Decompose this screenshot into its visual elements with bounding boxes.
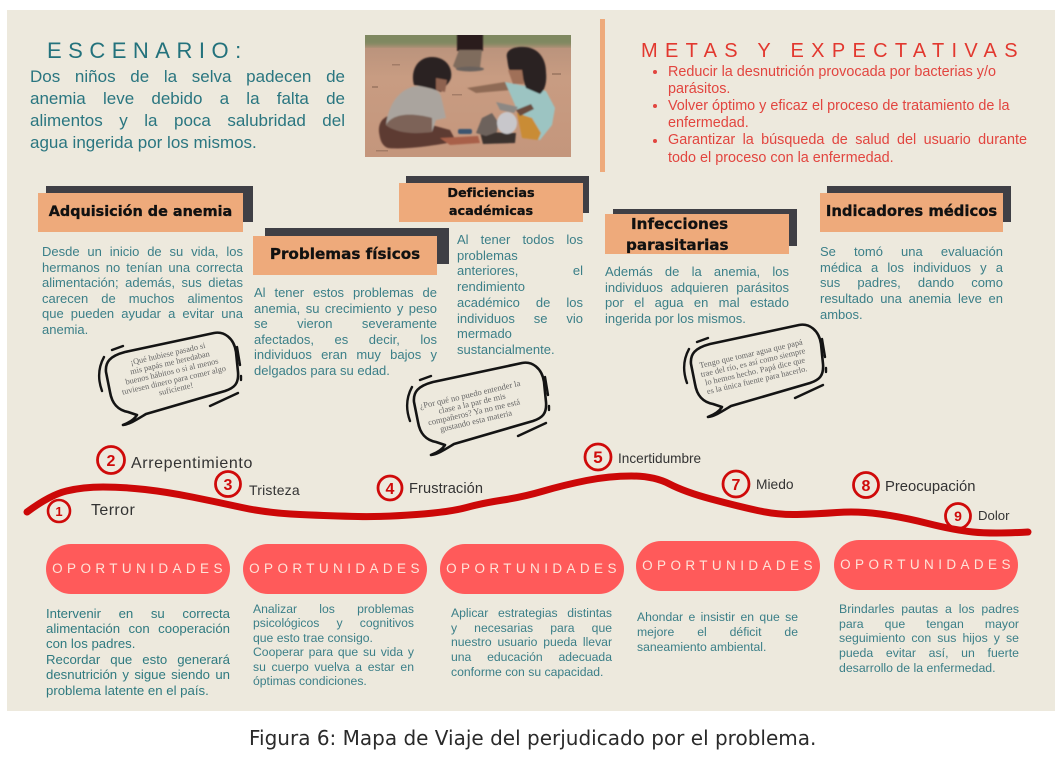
card: infecciones parasitarias bbox=[605, 209, 797, 326]
card text: anemia. bbox=[42, 322, 88, 337]
text: oportunidad 2: Analizar los problemas bbox=[253, 602, 414, 616]
pill: oportunidades 4: OPORTUNIDADES bbox=[642, 558, 817, 573]
emotion marker 2: 2 bbox=[107, 453, 116, 470]
text: oportunidad 5: Brindarles pautas a los padres bbox=[839, 602, 1019, 616]
card title bbox=[253, 236, 437, 275]
emotion marker 9 bbox=[946, 504, 970, 528]
speech bubble 3: lo hemos hecho. Papá dice que bbox=[704, 355, 806, 387]
card text: alimentación; además, sus dietas bbox=[42, 275, 243, 290]
card title: parasitarias bbox=[626, 236, 729, 254]
card text: individuos adquieren parásitos bbox=[605, 280, 789, 295]
card text: sustancialmente. bbox=[457, 342, 555, 357]
speech bubble 2: compañeros? Ya no me está bbox=[427, 396, 521, 427]
pill: oportunidades 2: OPORTUNIDADES bbox=[249, 561, 424, 576]
card text: afectados, es decir, los bbox=[254, 332, 437, 346]
card text: anteriores, el bbox=[457, 263, 583, 278]
text: oportunidad 3 bbox=[451, 606, 612, 679]
emotion marker 1: 1 bbox=[55, 504, 63, 519]
text: oportunidad 1: alimentación con cooperación bbox=[46, 621, 230, 636]
label: Arrepentimiento: Arrepentimiento bbox=[131, 455, 253, 472]
card title bbox=[38, 193, 243, 232]
card text: rendimiento bbox=[457, 279, 525, 294]
card: adquisición de anemia bbox=[38, 186, 253, 337]
text: oportunidad 4: mejore el déficit de bbox=[637, 625, 798, 639]
text: oportunidad 1: desnutrición y sigue siendo un bbox=[46, 667, 230, 682]
card text: problemas bbox=[457, 248, 518, 263]
emotion marker 5 bbox=[585, 444, 611, 470]
text: oportunidad 1: problema latente en el país. bbox=[46, 683, 209, 698]
card text: carecen de muchos alimentos bbox=[42, 291, 243, 306]
card text bbox=[457, 232, 583, 357]
text: oportunidad 3: Aplicar estrategias distintas bbox=[451, 606, 612, 620]
card text: individuos se vio bbox=[457, 311, 583, 326]
text: oportunidad 5: desarrollo de la enfermedad. bbox=[839, 661, 996, 675]
text: oportunidad 4 bbox=[637, 610, 798, 654]
text: oportunidad 2 bbox=[253, 602, 414, 688]
card text: individuos eran muy bajos y bbox=[254, 347, 437, 362]
card: indicadores médicos bbox=[820, 186, 1011, 322]
pill: oportunidades 5: OPORTUNIDADES bbox=[840, 557, 1015, 572]
card title: Deficiencias bbox=[447, 186, 535, 201]
speech bubble 2: clase a la par de mis bbox=[437, 391, 506, 416]
emotion marker 1 bbox=[48, 500, 70, 522]
speech bubble 3 bbox=[684, 325, 826, 417]
heading: escenario: ESCENARIO: bbox=[47, 38, 248, 63]
text: escenario description bbox=[30, 67, 345, 152]
label: Frustración: Frustración bbox=[409, 480, 483, 496]
pill: oportunidades 5 bbox=[834, 540, 1018, 590]
text: oportunidad 2: Cooperar para que su vida y bbox=[253, 645, 414, 659]
card text: Desde un inicio de su vida, los bbox=[42, 244, 243, 259]
card text: que pueden ayudar a evitar una bbox=[42, 306, 243, 321]
emotion marker 7: 7 bbox=[732, 477, 741, 494]
label: Miedo: Miedo bbox=[756, 477, 794, 492]
text: escenario description: Dos niños de la selva padecen de bbox=[30, 67, 345, 86]
emotion marker 3 bbox=[216, 472, 240, 496]
emotion marker 5: 5 bbox=[593, 448, 603, 467]
label: Tristeza: Tristeza bbox=[249, 482, 300, 498]
card text bbox=[605, 264, 789, 326]
card: deficiencias académicas bbox=[399, 176, 589, 357]
pill: oportunidades 2 bbox=[243, 544, 427, 594]
card text: se vieron severamente bbox=[254, 316, 437, 331]
emotion marker 2 bbox=[98, 446, 124, 474]
card text: Además de la anemia, los bbox=[605, 264, 789, 279]
card title: Indicadores médicos bbox=[826, 203, 997, 220]
text: oportunidad 1 bbox=[46, 606, 230, 698]
pill: oportunidades 1 bbox=[46, 544, 230, 594]
card title: Infecciones bbox=[631, 215, 728, 233]
card text bbox=[42, 244, 243, 337]
text: oportunidad 3: conforme con su capacidad. bbox=[451, 665, 603, 679]
card text bbox=[820, 244, 1003, 322]
speech bubble 1 bbox=[99, 333, 241, 425]
pill: oportunidades 3: OPORTUNIDADES bbox=[446, 561, 621, 576]
heading: metas y expectativas: METAS Y EXPECTATIVAS bbox=[641, 40, 1025, 62]
text: oportunidad 1: Intervenir en su correcta bbox=[46, 606, 230, 620]
speech bubble 1: buenos hábitos o si al menos bbox=[125, 356, 219, 387]
text: oportunidad 4: saneamiento ambiental. bbox=[637, 640, 766, 654]
list: metas: Reducir la desnutrición provocada por bacterias y/o bbox=[668, 64, 996, 80]
card text: sus padres, dando como bbox=[820, 275, 1003, 290]
label: Incertidumbre: Incertidumbre bbox=[618, 451, 701, 466]
pill: oportunidades 4 bbox=[636, 541, 820, 591]
card text: mermado bbox=[457, 326, 512, 341]
emotion marker 8: 8 bbox=[862, 478, 871, 495]
text: oportunidad 2: su cuerpo vuelva a estar en bbox=[253, 660, 414, 674]
list: metas bbox=[653, 64, 1027, 166]
speech bubble 2: ¿Por qué no puedo entender la bbox=[418, 378, 521, 411]
list: metas: todo el proceso con la enfermedad. bbox=[668, 150, 894, 166]
speech bubble 3: Tengo que tomar agua que papá bbox=[698, 338, 804, 370]
card: problemas físicos bbox=[253, 228, 449, 378]
speech bubble 2 bbox=[407, 363, 549, 455]
text: oportunidad 2: óptimas condiciones. bbox=[253, 674, 367, 688]
text: oportunidad 5: para que tengan mayor bbox=[839, 617, 1019, 631]
emotion marker 7 bbox=[723, 471, 749, 497]
speech bubble 1: suficiente! bbox=[158, 381, 194, 397]
speech bubble 3: es la única fuente para hacerlo. bbox=[706, 364, 808, 396]
text: oportunidad 2: psicológicos y cognitivos bbox=[253, 616, 414, 630]
card text: Al tener estos problemas de bbox=[254, 285, 437, 300]
list: metas: Garantizar la búsqueda de salud del usuario durante bbox=[668, 132, 1027, 148]
caption: Figura 6: Mapa de Viaje del perjudicado por el problema. bbox=[249, 726, 816, 750]
text: oportunidad 1: Recordar que esto generará bbox=[46, 652, 230, 667]
text: oportunidad 1: con los padres. bbox=[46, 636, 135, 651]
card text: académico de los bbox=[457, 295, 583, 310]
text: oportunidad 3: una educación adecuada bbox=[451, 650, 612, 664]
list: metas: parásitos. bbox=[668, 81, 730, 97]
card text: médica a los individuos y a bbox=[820, 260, 1003, 275]
list: metas: Volver óptimo y eficaz el proceso de tratamiento de la bbox=[668, 98, 1010, 114]
divider bar bbox=[600, 19, 605, 172]
card text: delgados para su edad. bbox=[254, 362, 390, 378]
card text bbox=[254, 285, 437, 378]
text: oportunidad 5 bbox=[839, 602, 1019, 675]
card text: anemia, su crecimiento y peso bbox=[254, 300, 437, 316]
text: oportunidad 4: Ahondar e insistir en que se bbox=[637, 610, 798, 624]
speech bubble 3: trae del río, es así como siempre bbox=[700, 346, 806, 379]
text: oportunidad 3: y necesarias para que bbox=[451, 621, 612, 635]
card text: Al tener todos los bbox=[457, 232, 583, 247]
pill: oportunidades 1: OPORTUNIDADES bbox=[52, 561, 227, 576]
list: metas: enfermedad. bbox=[668, 115, 749, 131]
speech bubble 1: ¡Qué hubiese pasado si bbox=[129, 341, 207, 367]
text: oportunidad 3: nuestro usuario pueda llevar bbox=[451, 635, 612, 649]
card text: por el agua en mal estado bbox=[605, 295, 789, 310]
label: Preocupación: Preocupación bbox=[885, 478, 976, 494]
text: oportunidad 2: que esto trae consigo. bbox=[253, 631, 373, 645]
card title bbox=[605, 214, 789, 254]
speech bubble 1: tuviesen dinero para comer algo bbox=[121, 364, 227, 397]
photo: two children sitting on the ground bbox=[365, 35, 571, 157]
text: oportunidad 5: seguimiento con sus hijos y se bbox=[839, 631, 1019, 645]
emotion curve bbox=[27, 476, 1028, 533]
text: escenario description: agua ingerida por los mismos. bbox=[30, 133, 257, 152]
text: oportunidad 5: pueda evitar así, un fuerte bbox=[839, 646, 1019, 660]
card title: académicas bbox=[449, 204, 533, 219]
pill: oportunidades 3 bbox=[440, 544, 624, 594]
card text: ambos. bbox=[820, 307, 863, 322]
speech bubble 1: mis papás me heredaban bbox=[129, 349, 211, 376]
speech bubble 2: gustando esta materia bbox=[439, 407, 513, 434]
card title bbox=[820, 193, 1003, 232]
card title: Problemas físicos bbox=[270, 245, 420, 263]
label: Dolor: Dolor bbox=[978, 508, 1010, 522]
text: escenario description: alimentos y la poca salubridad del bbox=[30, 111, 345, 130]
label: Terror: Terror bbox=[91, 502, 135, 519]
emotion marker 9: 9 bbox=[954, 508, 962, 524]
card title bbox=[399, 183, 583, 222]
emotion marker 4 bbox=[378, 476, 402, 500]
emotion marker 3: 3 bbox=[224, 477, 233, 494]
card text: Se tomó una evaluación bbox=[820, 244, 1003, 259]
card text: resultado una anemia leve en bbox=[820, 291, 1003, 306]
card text: ingerida por los mismos. bbox=[605, 311, 746, 326]
emotion marker 4: 4 bbox=[386, 481, 395, 498]
emotion marker 8 bbox=[854, 472, 878, 498]
card text: hermanos no tenían una correcta bbox=[42, 260, 243, 275]
text: escenario description: anemia leve debido a la falta de bbox=[30, 89, 345, 108]
card title: Adquisición de anemia bbox=[49, 204, 232, 220]
